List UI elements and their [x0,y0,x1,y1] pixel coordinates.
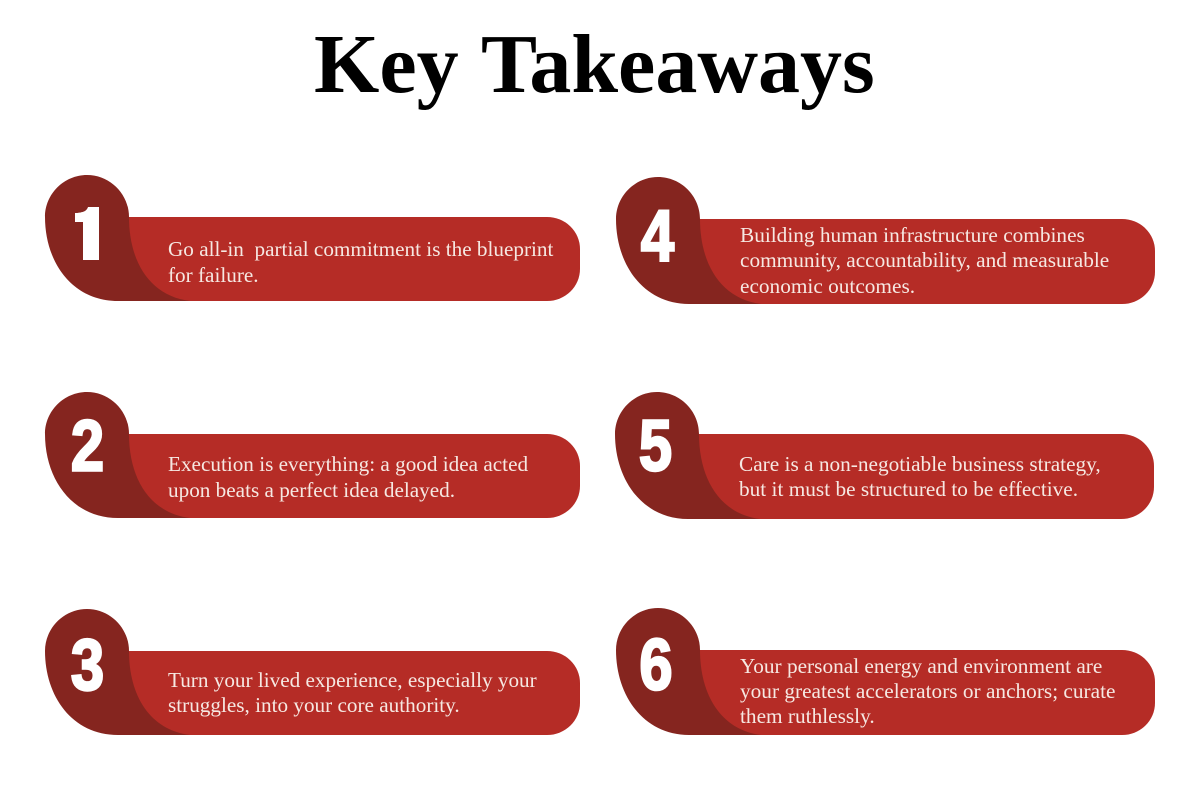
number 2: 2 [71,406,104,487]
panel: takeaway 4 [616,177,1155,304]
number 5: 5 [639,406,672,487]
title: Key [314,18,459,111]
number 1: 1 [70,194,104,275]
takeaway 1 text: for failure. [168,263,259,287]
takeaway 5 text: but it must be structured to be effective. [739,477,1078,501]
takeaway 6 text: your greatest accelerators or anchors; curate [740,679,1115,703]
takeaway 2 text: upon beats a perfect idea delayed. [168,478,455,502]
number 4: 4 [641,196,674,277]
takeaway 4 text: Building human infrastructure combines [740,223,1085,247]
takeaway 4 text: community, accountability, and measurable [740,248,1109,272]
title: Takeaways [481,18,875,111]
number 1 [75,207,99,260]
takeaway 1 text: Go all-in partial commitment is the blueprint [168,237,554,261]
takeaway 4 text: economic outcomes. [740,274,915,298]
takeaway 6 text: them ruthlessly. [740,704,875,728]
takeaway 5 text: Care is a non-negotiable business strategy, [739,452,1101,476]
takeaway 2 text: Execution is everything: a good idea acted [168,452,528,476]
panel: takeaway 1 [45,175,580,301]
panel: takeaway 3 [45,609,580,735]
takeaway 6 text: Your personal energy and environment are [740,654,1102,678]
panel: takeaway 2 [45,392,580,518]
panel: takeaway 5 [615,392,1154,519]
number 3: 3 [71,625,104,706]
number 6: 6 [639,625,673,706]
panel: takeaway 6 [616,608,1155,735]
takeaway 3 text: Turn your lived experience, especially your [168,668,537,692]
takeaway 3 text: struggles, into your core authority. [168,693,460,717]
